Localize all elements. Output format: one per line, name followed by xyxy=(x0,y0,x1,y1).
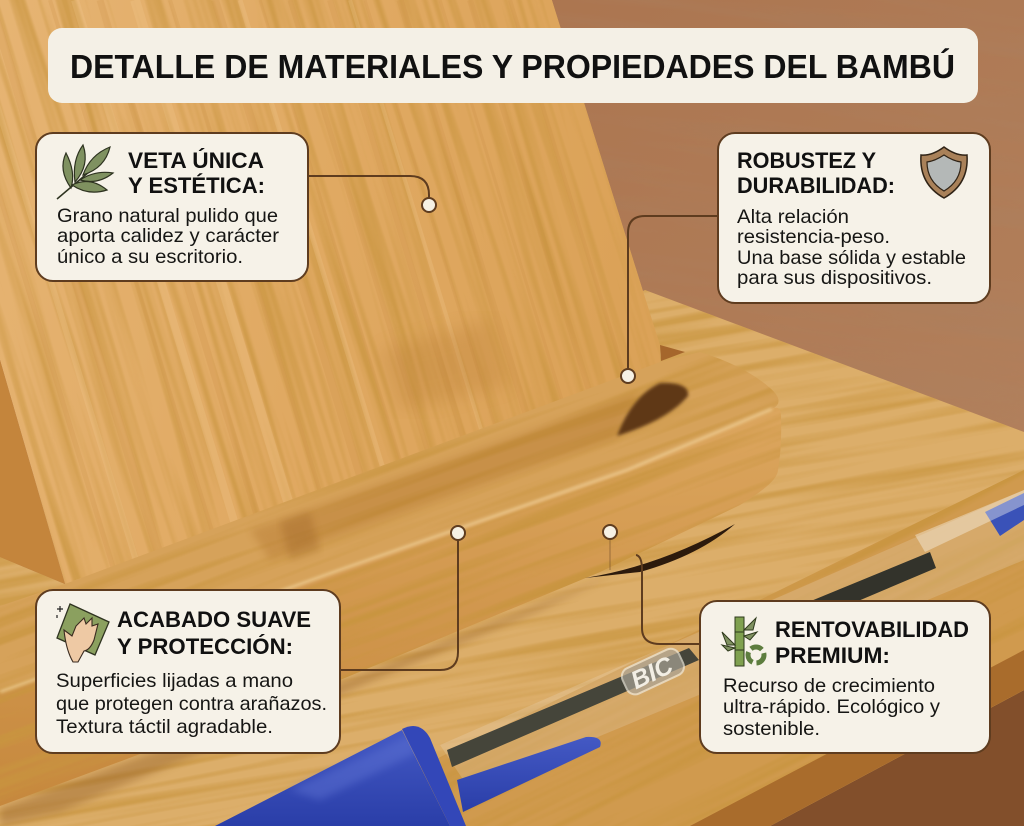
bamboo base board xyxy=(0,290,1024,826)
heading xyxy=(737,148,895,198)
body text: Superficies lijadas a mano xyxy=(56,670,293,692)
body text: único a su escritorio. xyxy=(57,246,243,268)
connector: rentabilidad xyxy=(603,525,700,644)
heading: Y PROTECCIÓN: xyxy=(117,634,293,659)
gap behind the holder xyxy=(660,345,685,361)
icon: hand polishing with cloth xyxy=(57,604,109,662)
body text: aporta calidez y carácter xyxy=(57,225,280,247)
body text xyxy=(723,675,940,740)
connector: acabado suave xyxy=(340,526,465,670)
panel: rentabilidad premium xyxy=(700,601,990,753)
body text: que protegen contra arañazos. xyxy=(56,693,327,715)
icon: shield xyxy=(921,147,967,198)
pen: clear barrel and ink xyxy=(440,490,1024,790)
body text: Una base sólida y estable xyxy=(737,247,966,269)
body text: Grano natural pulido que xyxy=(57,205,278,227)
title banner xyxy=(48,28,978,103)
heading: Y ESTÉTICA: xyxy=(128,173,265,198)
body text: Textura táctil agradable. xyxy=(56,716,273,738)
bamboo holder: top face xyxy=(0,352,779,692)
icon: bamboo leaves xyxy=(57,145,113,199)
heading: DURABILIDAD: xyxy=(737,173,895,198)
heading: RENTOVABILIDAD xyxy=(775,617,969,642)
connector: veta única xyxy=(308,176,436,212)
BIC logo: BIC xyxy=(627,651,678,695)
pen: blue cap xyxy=(215,726,601,826)
body text: resistencia-peso. xyxy=(737,226,890,248)
heading: PREMIUM: xyxy=(775,643,890,668)
icon: bamboo with recycling xyxy=(722,617,764,666)
heading xyxy=(128,148,265,198)
body text xyxy=(737,206,966,289)
panel: acabado suave xyxy=(36,590,340,753)
heading xyxy=(775,617,969,668)
body text: Recurso de crecimiento xyxy=(723,675,935,697)
bamboo holder: front face xyxy=(0,408,781,806)
body text: sostenible. xyxy=(723,718,820,740)
heading: ROBUSTEZ Y xyxy=(737,148,876,173)
connector: robustez xyxy=(621,216,718,383)
body text xyxy=(56,670,327,738)
body text: para sus dispositivos. xyxy=(737,267,932,289)
body text: Alta relación xyxy=(737,206,849,228)
panel: robustez y durabilidad xyxy=(718,133,990,303)
bamboo upright board xyxy=(0,0,687,584)
bamboo upright board side xyxy=(0,360,65,584)
heading xyxy=(117,607,311,659)
body text: ultra-rápido. Ecológico y xyxy=(723,696,940,718)
title: DETALLE DE MATERIALES Y PROPIEDADES DEL BAMBÚ xyxy=(70,48,955,86)
heading: VETA ÚNICA xyxy=(128,148,264,173)
BIC logo xyxy=(619,646,687,698)
heading: ACABADO SUAVE xyxy=(117,607,311,632)
panel: veta única xyxy=(36,133,308,281)
body text xyxy=(57,205,280,268)
pen slot xyxy=(617,383,688,436)
shadow gap under the holder xyxy=(585,524,735,578)
